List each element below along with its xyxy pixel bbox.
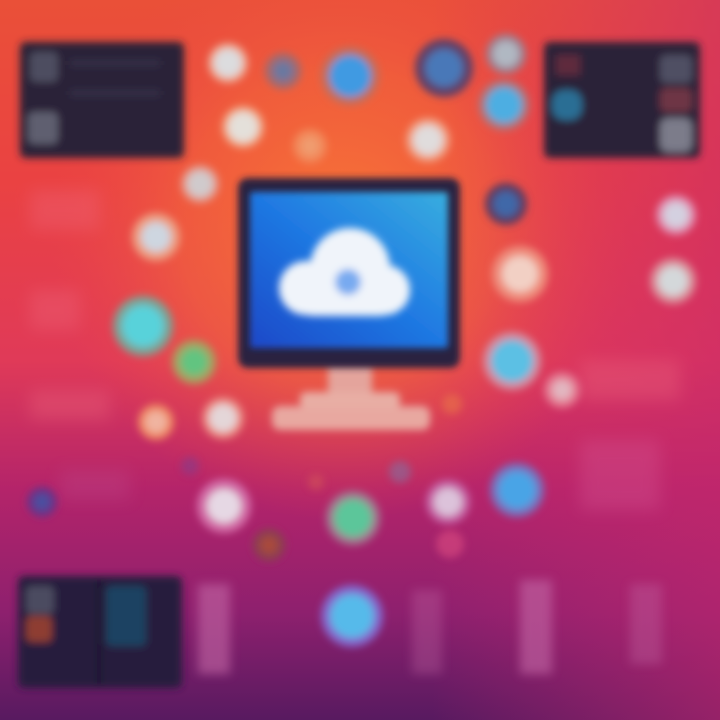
monitor [238,178,460,430]
small faint dots [181,394,464,558]
node: teal and green dots [113,296,380,561]
icon: faint text columns bottom [198,580,662,674]
faint text blocks on the sides [30,190,680,510]
monitor stand [272,362,430,430]
monitor frame [238,178,460,368]
panel: bottom-left dark window [18,576,182,688]
node: blue dots [27,39,544,647]
node: pale dots [132,34,696,533]
network nodes [27,34,696,647]
panel: top-left dark window [20,42,184,158]
icon: cloud [279,228,410,316]
monitor screen [250,192,448,348]
panel: top-right dark window [544,42,700,158]
